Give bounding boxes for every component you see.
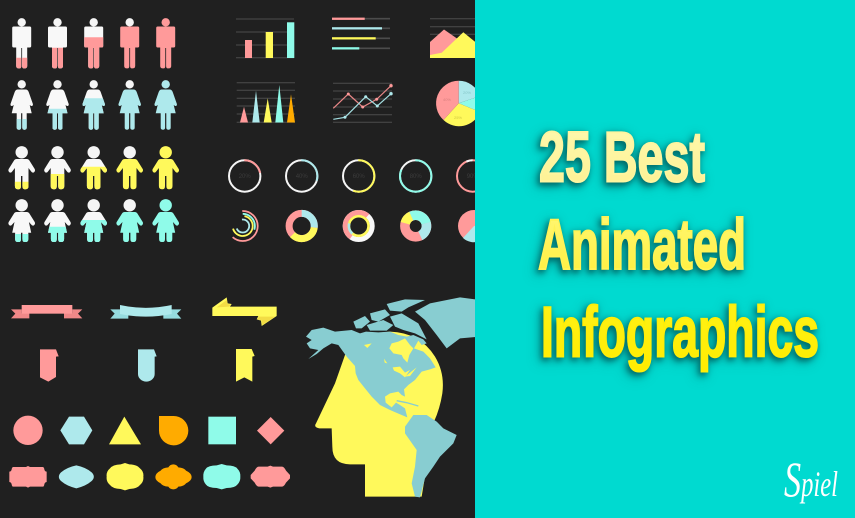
- map: south america: [405, 415, 457, 497]
- shape: hexagon: [60, 417, 92, 444]
- pie chart: 20%: [463, 90, 471, 95]
- logo: Spiel: Spiel: [784, 451, 838, 507]
- shape: circle: [13, 416, 43, 445]
- pie chart: [436, 81, 480, 126]
- area chart: [430, 19, 475, 58]
- ring 80%: 80%: [410, 174, 422, 180]
- girls row: [8, 199, 179, 242]
- boys row: [8, 146, 179, 189]
- badge: pink rounded: [9, 466, 47, 488]
- horizontal bar chart: [332, 18, 390, 50]
- donut chart: four segments: [401, 212, 430, 240]
- badge: orange scalloped: [155, 464, 192, 489]
- badge: pink notched: [251, 466, 290, 488]
- shape: teardrop: [159, 416, 188, 445]
- map: caribbean: [397, 401, 418, 406]
- shape: square: [208, 417, 236, 444]
- pie chart: 40%: [443, 97, 451, 102]
- shape: triangle: [109, 417, 141, 444]
- ring 40%: 40%: [296, 174, 308, 180]
- title: [538, 118, 819, 372]
- bookmark: blue: [138, 349, 157, 382]
- ring 90%: [452, 156, 493, 196]
- ring 90%: 90%: [467, 174, 479, 180]
- ring 60%: 60%: [353, 174, 365, 180]
- bookmark: pink: [40, 349, 59, 382]
- head silhouette: [315, 332, 443, 497]
- ribbon: pink: [11, 305, 82, 318]
- ribbon: yellow arrow: [212, 297, 277, 326]
- map: hudson bay and lakes: [364, 338, 417, 377]
- pictogram rows: people: [8, 18, 179, 242]
- right teal panel: [475, 0, 855, 518]
- ring 20%: 20%: [239, 174, 251, 180]
- radial arcs chart: [228, 211, 258, 241]
- head silhouette with world map: [306, 297, 480, 497]
- donut chart: three segments: [288, 212, 316, 240]
- ring 80%: [400, 160, 431, 192]
- women row: [10, 80, 177, 130]
- line chart: [333, 83, 393, 122]
- triangle chart: [237, 83, 295, 122]
- map: greenland: [415, 297, 480, 348]
- shape: diamond: [257, 417, 284, 444]
- bar chart: [236, 19, 294, 58]
- badge: yellow scalloped: [107, 463, 143, 490]
- badge: blue lozenge: [59, 465, 94, 488]
- ring 40%: [286, 160, 317, 192]
- ring 20%: [229, 160, 260, 192]
- ribbons, bookmarks, shapes, badges: [9, 297, 290, 490]
- bookmark: yellow: [236, 349, 255, 382]
- progress rings: [229, 156, 493, 196]
- ring 60%: [343, 160, 374, 192]
- pie chart: 25%: [454, 115, 462, 120]
- map: north america: [306, 328, 436, 417]
- pie chart: partial: [458, 210, 490, 242]
- title line 2: Animated: [538, 206, 746, 285]
- badge: teal scalloped: [203, 464, 240, 489]
- donut chart: nested rings: [340, 207, 378, 245]
- map: arctic islands: [353, 299, 427, 339]
- men row: [12, 18, 175, 68]
- ribbon: blue: [110, 305, 181, 319]
- left infographic assets: [8, 18, 493, 497]
- title line 1: 25 Best: [539, 118, 705, 198]
